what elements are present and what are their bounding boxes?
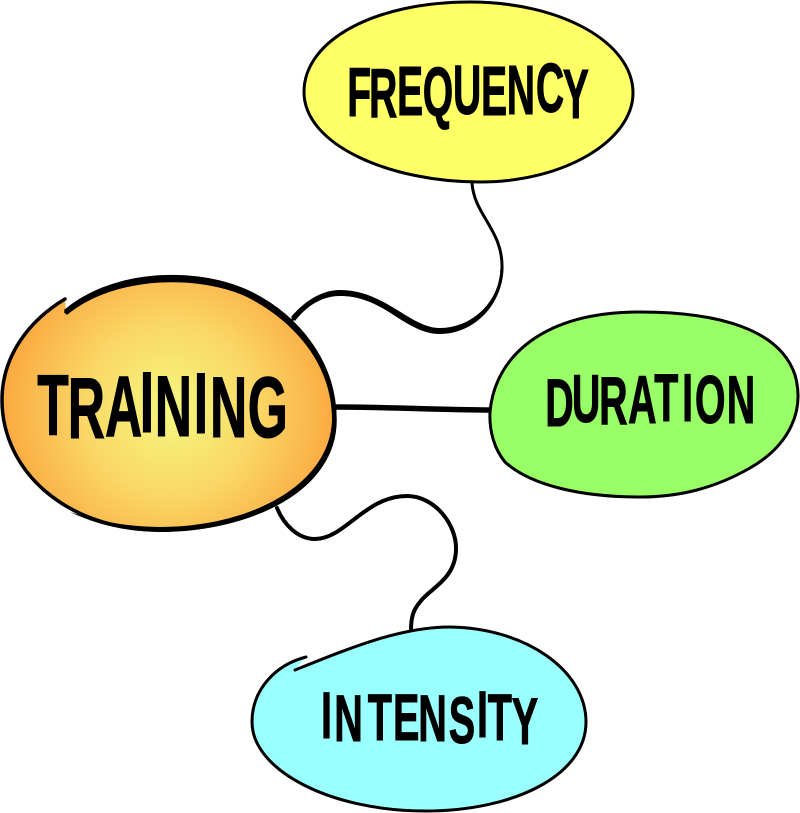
connector: training to frequency [291, 183, 504, 334]
label: frequency: FREQUENCY [347, 50, 589, 134]
label: training: TRAINING [37, 356, 288, 457]
label: intensity: INTENSITY [321, 678, 538, 759]
node: training [2, 275, 336, 532]
node: frequency [304, 2, 633, 182]
node: intensity [252, 627, 586, 811]
label: duration: DURATION [545, 360, 755, 441]
connector: training to intensity [277, 496, 456, 630]
node: duration [490, 312, 798, 497]
connector: training to duration [337, 407, 491, 410]
